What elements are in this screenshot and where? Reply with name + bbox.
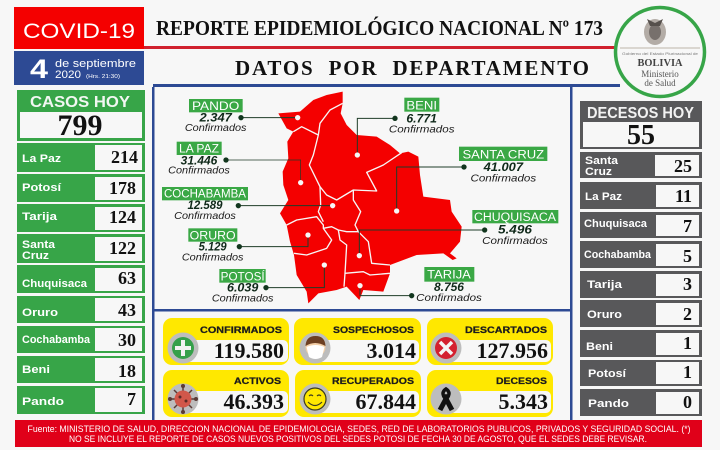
card: sospechosos: [294, 318, 421, 365]
row: La Paz: [17, 143, 145, 172]
footer: source note: [15, 420, 702, 447]
row: Santa Cruz: Santa: [22, 239, 56, 251]
decesos hoy heading: 55: [627, 120, 655, 151]
card: descartados: [427, 318, 553, 365]
row: Santa Cruz: 25: [674, 156, 692, 176]
row: Tarija: 3: [683, 274, 692, 294]
card: activos: [163, 370, 289, 417]
callout: Pando: PANDO: [192, 99, 239, 113]
callout: Cochabamba: 12.589: [187, 198, 223, 212]
row: Tarija: Tarija: [22, 211, 58, 223]
row: Oruro: Oruro: [587, 309, 622, 321]
map: departments: [278, 92, 462, 303]
row: Tarija: Tarija: [587, 279, 623, 291]
card: sospechosos: 3.014: [366, 338, 416, 363]
row: Potosí: [580, 360, 702, 386]
callout: Beni: BENI: [406, 98, 437, 112]
callout: Cochabamba: Confirmados: [174, 211, 236, 222]
row: Pando: [17, 386, 145, 414]
row: Pando: 7: [127, 389, 136, 409]
callout: Beni: 6.771: [406, 111, 437, 125]
row: Oruro: 2: [683, 304, 692, 324]
row: Santa Cruz: [580, 152, 702, 178]
row: Beni: 1: [683, 333, 692, 353]
date badge: 4: [30, 54, 48, 84]
row: La Paz: 214: [111, 147, 138, 167]
callout: Pando: Confirmados: [185, 123, 247, 134]
panel: decesos hoy: [580, 101, 702, 416]
callout: Chuquisaca: Confirmados: [482, 236, 548, 247]
row: Chuquisaca: [580, 212, 702, 238]
panel: casos hoy: [17, 90, 145, 414]
callout: Potosí: 6.039: [227, 281, 259, 295]
logo: ministerio de salud: [616, 8, 704, 96]
date badge: de septiembre: [55, 58, 136, 70]
callout: Santa Cruz: 41.007: [483, 160, 524, 174]
row: Beni: Beni: [22, 364, 50, 376]
row: Beni: 18: [118, 361, 136, 381]
row: Potosí: 178: [109, 178, 136, 198]
card: decesos: DECESOS: [496, 376, 547, 387]
callout: Oruro: [182, 228, 311, 263]
callout: Santa Cruz: [394, 147, 547, 214]
logo: ministerio de salud: BOLIVIA: [638, 58, 683, 69]
row: Pando: 0: [683, 392, 692, 412]
card: decesos: 5.343: [498, 389, 548, 414]
row: Oruro: [580, 300, 702, 327]
row: Chuquisaca: 7: [683, 216, 692, 236]
title: REPORTE EPIDEMIOLÓGICO NACIONAL Nº 173: [156, 16, 603, 40]
card: confirmados: [163, 318, 289, 365]
date badge: 2020: [55, 69, 81, 81]
row: Beni: Beni: [586, 341, 613, 353]
callout: Chuquisaca: CHUQUISACA: [474, 210, 557, 224]
row: Cochabamba: [17, 326, 145, 353]
card: recuperados: 67.844: [356, 389, 416, 414]
row: Cochabamba: 5: [683, 246, 692, 266]
covid-19 badge: [14, 7, 144, 49]
callout: Santa Cruz: SANTA CRUZ: [462, 147, 545, 161]
icon: virus: [168, 384, 198, 414]
covid-19 badge: COVID-19: [23, 20, 135, 43]
row: Chuquisaca: Chuquisaca: [584, 218, 648, 230]
panel: national totals: [163, 318, 553, 417]
callout: La Paz: LA PAZ: [179, 142, 219, 156]
row: Chuquisaca: Chuquisaca: [22, 278, 88, 290]
row: Santa Cruz: Cruz: [22, 250, 50, 262]
logo: ministerio de salud: Gobierno del Estado Plurinacional de: [622, 51, 699, 56]
callout: Tarija: TARIJA: [427, 268, 472, 282]
row: Santa Cruz: Santa: [585, 155, 619, 167]
callout: Chuquisaca: 5.496: [498, 223, 532, 237]
callout: Beni: [355, 98, 455, 158]
row: Potosí: 1: [683, 362, 692, 382]
casos hoy heading: 799: [58, 109, 102, 142]
card: descartados: 127.956: [476, 338, 548, 363]
card: activos: 46.393: [224, 389, 284, 414]
row: Potosí: [17, 174, 145, 202]
row: Chuquisaca: 63: [118, 268, 136, 288]
row: Chuquisaca: [17, 265, 145, 293]
card: decesos: [427, 370, 553, 417]
icon: smile: [300, 384, 330, 414]
icon: black ribbon: [430, 384, 462, 414]
card: activos: ACTIVOS: [234, 376, 281, 387]
callout: Potosí: POTOSÍ: [221, 268, 265, 283]
callout: Beni: Confirmados: [389, 124, 455, 135]
row: Cochabamba: Cochabamba: [584, 249, 652, 261]
footer: source note: Fuente: MINISTERIO DE SALUD, DIRECCION NACIONAL DE EPIDEMIOLOGIA, SEDES, RED DE LABORATORIOS PUBLICOS, PRIVADOS Y SEGURIDAD SOCIAL. (*): [28, 424, 690, 434]
card: confirmados: 119.580: [214, 338, 284, 363]
row: Oruro: 43: [118, 300, 136, 320]
callout: La Paz: [168, 142, 303, 185]
date badge: [14, 51, 144, 85]
decesos hoy heading: [580, 101, 702, 151]
callout: La Paz: 31.446: [181, 153, 218, 167]
footer: source note: NO SE INCLUYE EL REPORTE DE CASOS NUEVOS POSITIVOS DEL SEDES POTOSI DE FECHA 30 DE AGOSTO, QUE EL SEDES DEBE REVISAR.: [69, 434, 647, 444]
callout: Cochabamba: COCHABAMBA: [164, 187, 247, 201]
icon: plus: [168, 332, 198, 364]
row: La Paz: [580, 182, 702, 209]
row: Tarija: [580, 271, 702, 298]
row: Pando: Pando: [588, 398, 629, 410]
icon: national crest: [644, 19, 666, 45]
logo: ministerio de salud: Ministerio: [641, 69, 679, 79]
card: recuperados: [295, 370, 421, 417]
callout: Pando: [185, 99, 300, 134]
callout: Tarija: Confirmados: [416, 293, 482, 304]
callout: Oruro: 5.129: [199, 240, 227, 254]
row: Tarija: 124: [109, 207, 136, 227]
row: Tarija: [17, 204, 145, 232]
row: Oruro: Oruro: [22, 307, 58, 319]
card: descartados: DESCARTADOS: [465, 325, 547, 336]
callout: Tarija: [357, 267, 482, 304]
logo: ministerio de salud: de Salud: [644, 78, 676, 88]
row: La Paz: La Paz: [22, 153, 62, 165]
row: Cochabamba: 30: [118, 330, 136, 350]
icon: cross: [430, 332, 462, 364]
callout: Potosí: [212, 262, 327, 305]
row: Cochabamba: [580, 241, 702, 268]
casos hoy heading: [17, 90, 145, 142]
callout: Oruro: ORURO: [190, 228, 236, 242]
subtitle: DATOS POR DEPARTAMENTO: [235, 56, 589, 80]
row: Oruro: [17, 296, 145, 323]
row: Pando: [580, 389, 702, 416]
row: Pando: Pando: [22, 396, 64, 408]
row: Potosí: Potosí: [22, 182, 62, 194]
row: Potosí: Potosí: [588, 368, 627, 380]
row: La Paz: La Paz: [585, 191, 623, 203]
row: Beni: [580, 330, 702, 357]
row: Cochabamba: Cochabamba: [22, 334, 91, 346]
callout: Santa Cruz: Confirmados: [470, 174, 536, 185]
decesos hoy heading: DECESOS HOY: [587, 105, 694, 122]
callout: Cochabamba: [162, 187, 335, 222]
panel: map of Bolivia: [162, 92, 558, 305]
callout: Chuquisaca: [357, 210, 558, 258]
card: confirmados: CONFIRMADOS: [200, 325, 282, 336]
row: Santa Cruz: 122: [109, 238, 136, 258]
callout: Oruro: Confirmados: [182, 252, 244, 263]
icon: face with mask: [300, 332, 330, 364]
callout: Pando: 2.347: [198, 111, 233, 125]
row: Santa Cruz: Cruz: [585, 166, 613, 178]
callout: Potosí: Confirmados: [212, 294, 274, 305]
callout: La Paz: Confirmados: [168, 166, 230, 177]
row: La Paz: 11: [675, 186, 692, 206]
row: Beni: [17, 356, 145, 383]
row: Santa Cruz: [17, 234, 145, 263]
card: sospechosos: SOSPECHOSOS: [333, 325, 414, 336]
date badge: (Hrs. 21:30): [86, 74, 120, 80]
callout: Tarija: 8.756: [434, 280, 464, 294]
card: recuperados: RECUPERADOS: [332, 376, 414, 387]
casos hoy heading: CASOS HOY: [30, 94, 130, 111]
